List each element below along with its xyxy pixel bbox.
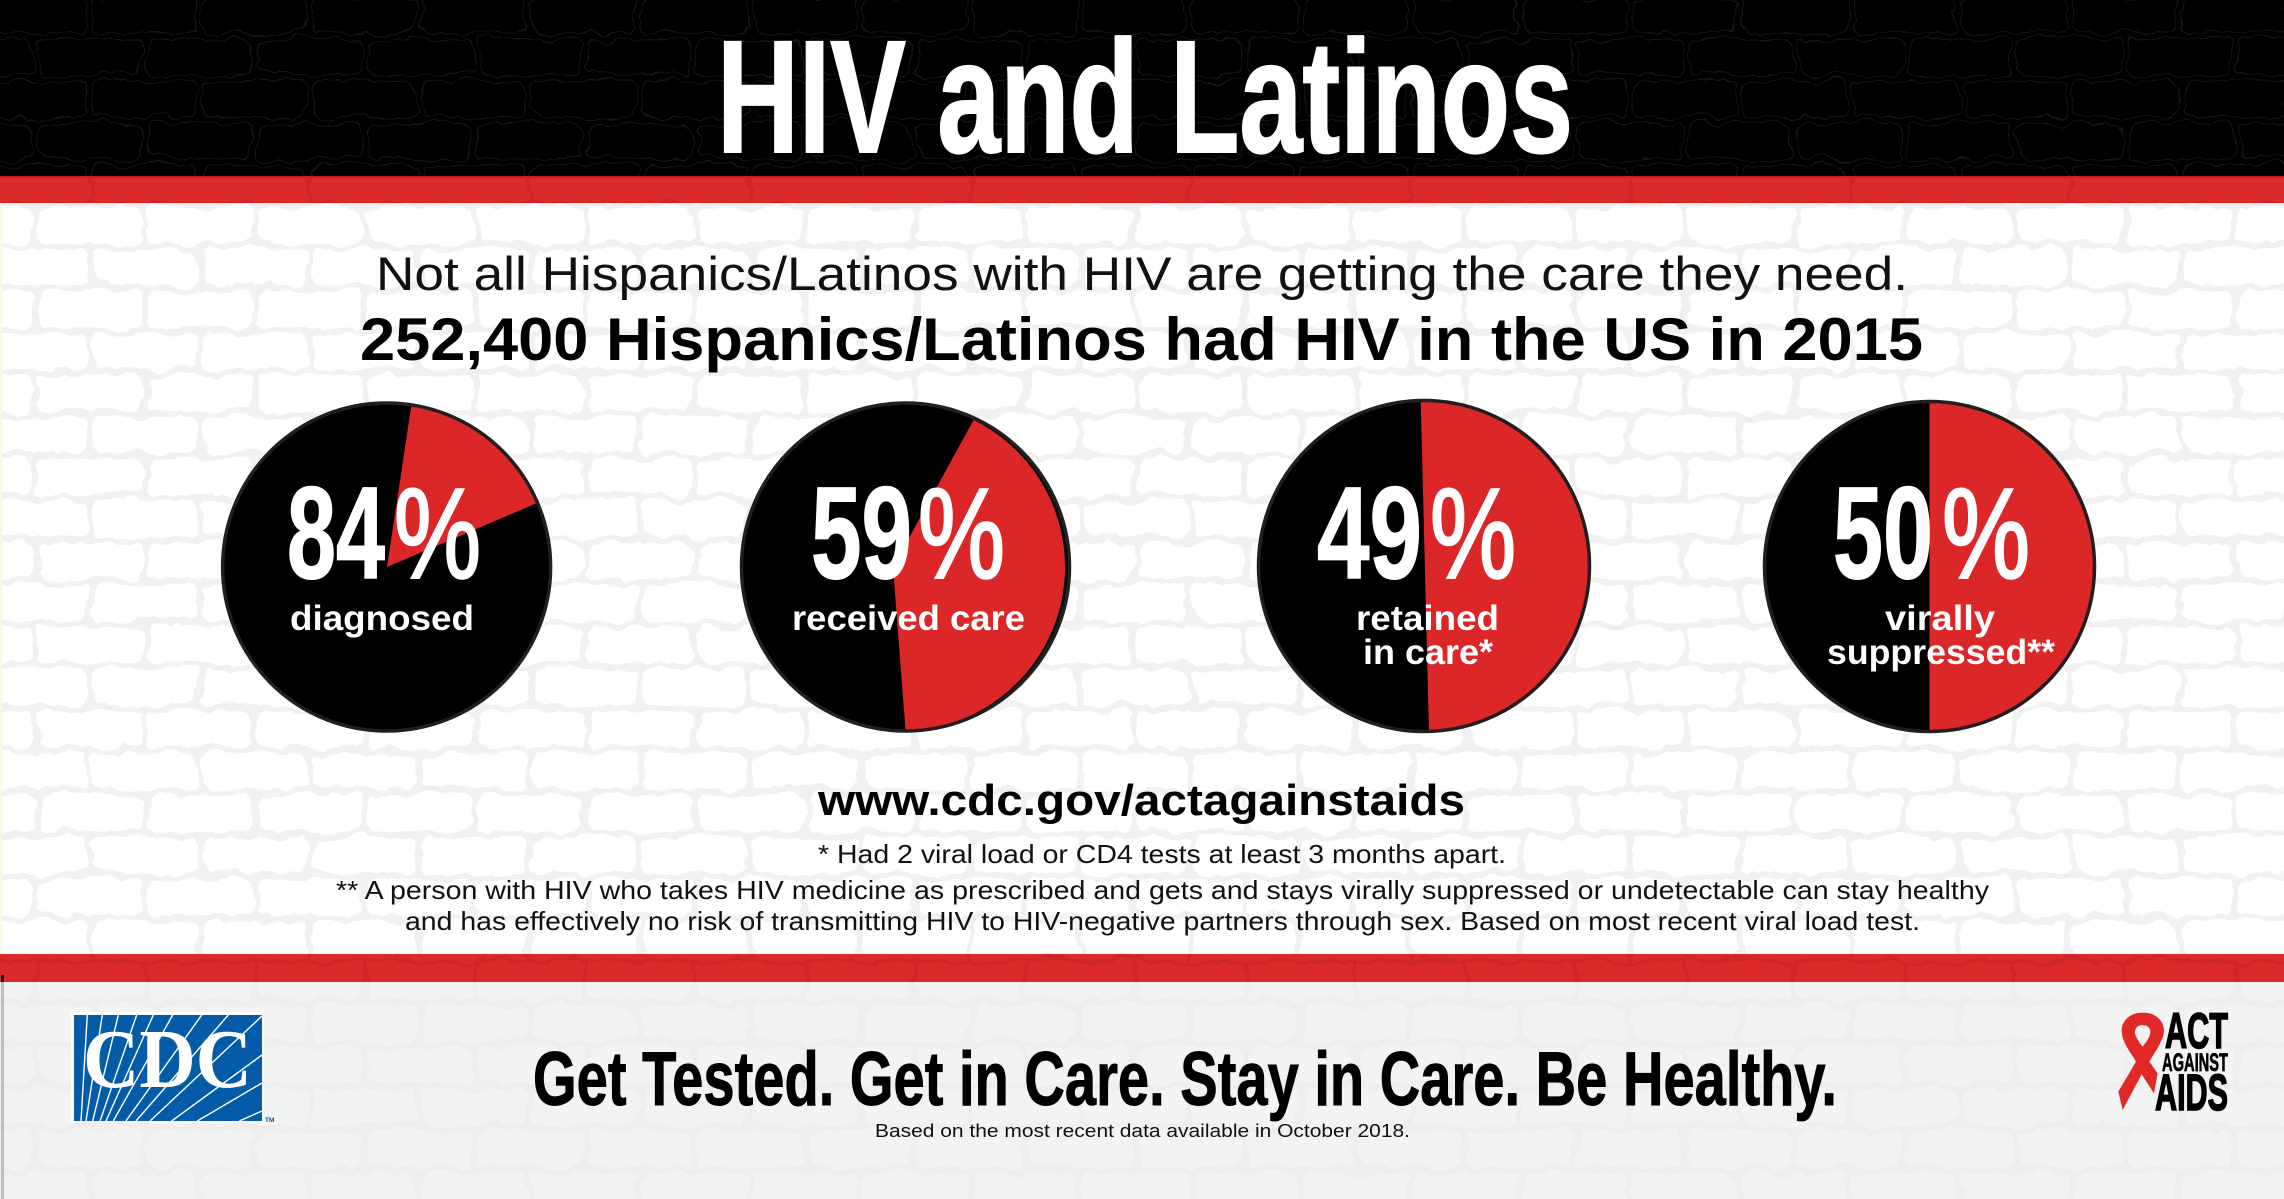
- left edge line: wall: [0, 203, 2, 954]
- icon: red ribbon: [2118, 1013, 2164, 1110]
- pie chart: 50% virally suppressed: suppressed**: [1827, 633, 2055, 672]
- red band: bottom: [0, 954, 2284, 982]
- pie chart: 50% virally suppressed: %: [1942, 463, 2030, 606]
- footnote: virally suppressed: [336, 875, 1989, 936]
- pie chart: 49% retained in care: retained: [1356, 599, 1499, 638]
- pie chart: 59% received care: %: [918, 463, 1005, 606]
- pie chart: 49% retained in care: [1258, 400, 1590, 732]
- logo: Act Against AIDS: ACT: [2165, 1003, 2228, 1059]
- logo: CDC: CDC: [83, 1013, 252, 1106]
- left edge line: footer: [1, 975, 4, 1199]
- pie chart: 50% virally suppressed: 50: [1833, 459, 1933, 606]
- pie chart: 49% retained in care: %: [1430, 463, 1516, 606]
- footnote: virally suppressed: and has effectively no risk of transmitting HIV to HIV-negative partners through sex. Based on most recent viral load test.: [405, 906, 1920, 936]
- key statistic heading: 252,400 Hispanics/Latinos had HIV in the US in 2015: [360, 306, 1923, 373]
- pie chart: 84% diagnosed: [223, 403, 551, 731]
- pie chart: 49% retained in care: 49: [1317, 459, 1422, 606]
- pie chart: 84% diagnosed: diagnosed: [290, 599, 474, 638]
- tagline: Get Tested. Get in Care. Stay in Care. Be Healthy.: [533, 1037, 1837, 1122]
- footnote: virally suppressed: ** A person with HIV who takes HIV medicine as prescribed and gets and stays virally suppressed or undetectable can stay healthy: [336, 875, 1989, 905]
- pie chart: 50% virally suppressed: [1764, 402, 2094, 732]
- pie chart: 59% received care: [742, 403, 1070, 731]
- red band: top: [0, 176, 2284, 203]
- pie chart: 49% retained in care: in care*: [1363, 633, 1493, 672]
- panel: white brick wall background: [0, 190, 2284, 965]
- logo: Act Against AIDS: AGAINST: [2162, 1049, 2228, 1077]
- logo: Act Against AIDS: AIDS: [2155, 1064, 2228, 1121]
- footnote: retained in care: * Had 2 viral load or CD4 tests at least 3 months apart.: [818, 839, 1506, 869]
- panel: grey footer band: [0, 970, 2284, 1199]
- pie chart: 50% virally suppressed: virally: [1885, 599, 1996, 638]
- subheading: Not all Hispanics/Latinos with HIV are getting the care they need.: [376, 247, 1908, 300]
- pie chart: 84% diagnosed: %: [394, 463, 481, 606]
- logo: Act Against AIDS: [2118, 1003, 2228, 1121]
- panel: black header band: [0, 0, 2284, 185]
- title: HIV and Latinos: [717, 7, 1573, 186]
- pie chart: 59% received care: 59: [811, 459, 912, 606]
- data source note: Based on the most recent data available in October 2018.: [875, 1120, 1410, 1141]
- website url: www.cdc.gov/actagainstaids: [817, 776, 1465, 825]
- pie chart: 59% received care: received care: [792, 599, 1025, 638]
- pie chart: 84% diagnosed: 84: [287, 459, 385, 606]
- logo: CDC: TM: [265, 1117, 274, 1124]
